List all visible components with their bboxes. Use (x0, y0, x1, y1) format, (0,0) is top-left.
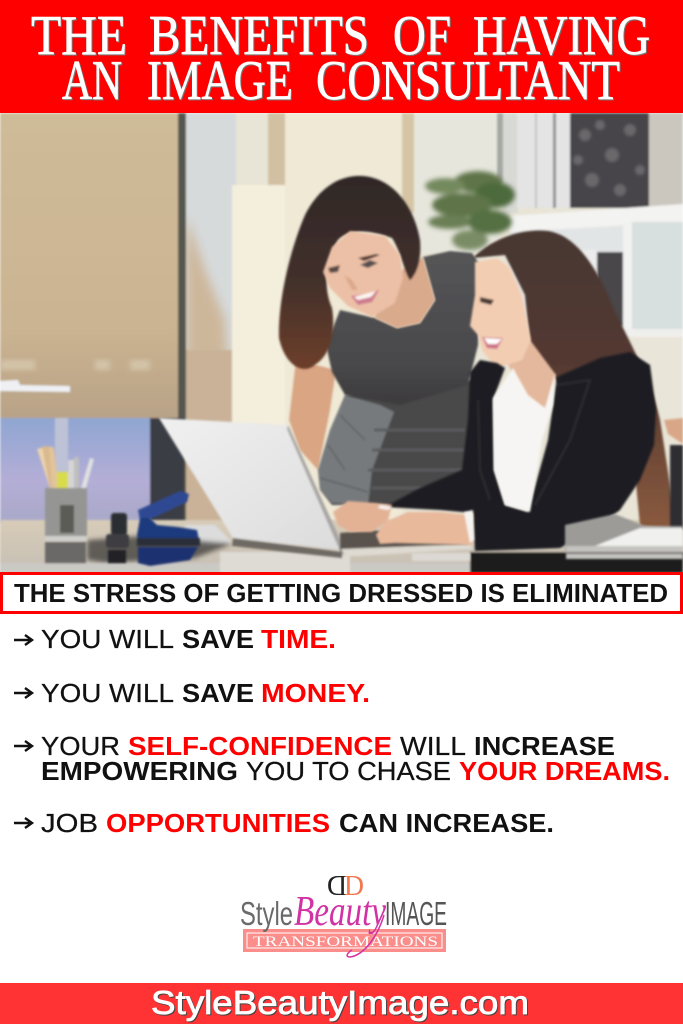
bullet: save time (14, 624, 336, 654)
title: IMAGE (147, 50, 293, 112)
title: HAVING (473, 5, 650, 67)
laptop (159, 418, 472, 558)
woman 1 skirt (318, 380, 474, 505)
logo wordmark: Beauty (294, 889, 386, 935)
title: BENEFITS (149, 5, 369, 67)
logo monogram: D (327, 870, 347, 902)
logo wordmark: IMAGE (385, 895, 447, 932)
bullet: save time: TIME. (261, 624, 336, 654)
woman 2 face (470, 258, 556, 422)
woman 2 white shirt (493, 368, 555, 512)
logo box (243, 929, 446, 952)
bullet: self-confidence: WILL (400, 731, 466, 761)
bullet: job opportunities: CAN INCREASE. (339, 808, 554, 838)
logo monogram (327, 870, 364, 902)
logo wordmark (240, 889, 447, 957)
woman 1 hair (279, 176, 420, 369)
footer banner: StyleBeautyImage.com (151, 984, 529, 1021)
bullet: job opportunities: JOB (41, 808, 98, 838)
woman 2 blazer (385, 352, 656, 551)
bullet: save time: YOU WILL (41, 624, 174, 654)
bullet: self-confidence (14, 731, 670, 786)
title: THE (31, 5, 127, 67)
pencil holder and pens (37, 446, 94, 563)
blue window (0, 418, 150, 523)
bullet: job opportunities (14, 808, 554, 838)
woman 2 hair (473, 231, 677, 528)
bullet: save money: SAVE (182, 678, 254, 708)
bullet: self-confidence: YOUR DREAMS. (459, 756, 670, 786)
logo box: TRANSFORMATIONS (253, 934, 438, 950)
logo monogram: D (344, 870, 364, 902)
stapler (106, 513, 129, 563)
woman 1 arm (289, 360, 336, 470)
shelf lamp (0, 380, 70, 392)
bullet: save money: YOU WILL (41, 678, 174, 708)
bullet: self-confidence: SELF-CONFIDENCE (128, 731, 392, 761)
typing hands (333, 501, 474, 545)
woman 1 face (323, 231, 403, 317)
footer banner (0, 983, 683, 1024)
photo: two women at a laptop in an office (0, 113, 683, 573)
plant (425, 171, 515, 250)
title: CONSULTANT (316, 50, 620, 112)
folders and papers on desk (412, 514, 683, 561)
bullet: save money (14, 678, 370, 708)
bullet: self-confidence: INCREASE (474, 731, 615, 761)
title: OF (393, 5, 451, 67)
arrow icon (14, 688, 32, 698)
logo wordmark: Style (240, 895, 293, 932)
hole punch (137, 491, 200, 566)
arrow icon (14, 635, 32, 645)
subtitle box: THE STRESS OF GETTING DRESSED IS ELIMINATED (14, 578, 668, 608)
header banner (0, 0, 683, 113)
arrow icon (14, 818, 32, 828)
woman 1 neck (375, 257, 435, 328)
title: AN (62, 50, 122, 112)
bullet: self-confidence: YOU TO CHASE (246, 756, 451, 786)
woman 1 dress top (326, 251, 480, 405)
bullet: self-confidence: EMPOWERING (41, 756, 238, 786)
logo: Style Beauty Image Transformations (240, 870, 447, 957)
bullet: job opportunities: OPPORTUNITIES (106, 808, 330, 838)
title (31, 5, 650, 112)
office background (0, 113, 683, 573)
desk (0, 520, 683, 573)
bullet: self-confidence: YOUR (41, 731, 120, 761)
bullet: save money: MONEY. (261, 678, 370, 708)
bullet: save time: SAVE (182, 624, 254, 654)
arrow icon (14, 741, 32, 751)
right arm and chair (664, 418, 683, 530)
